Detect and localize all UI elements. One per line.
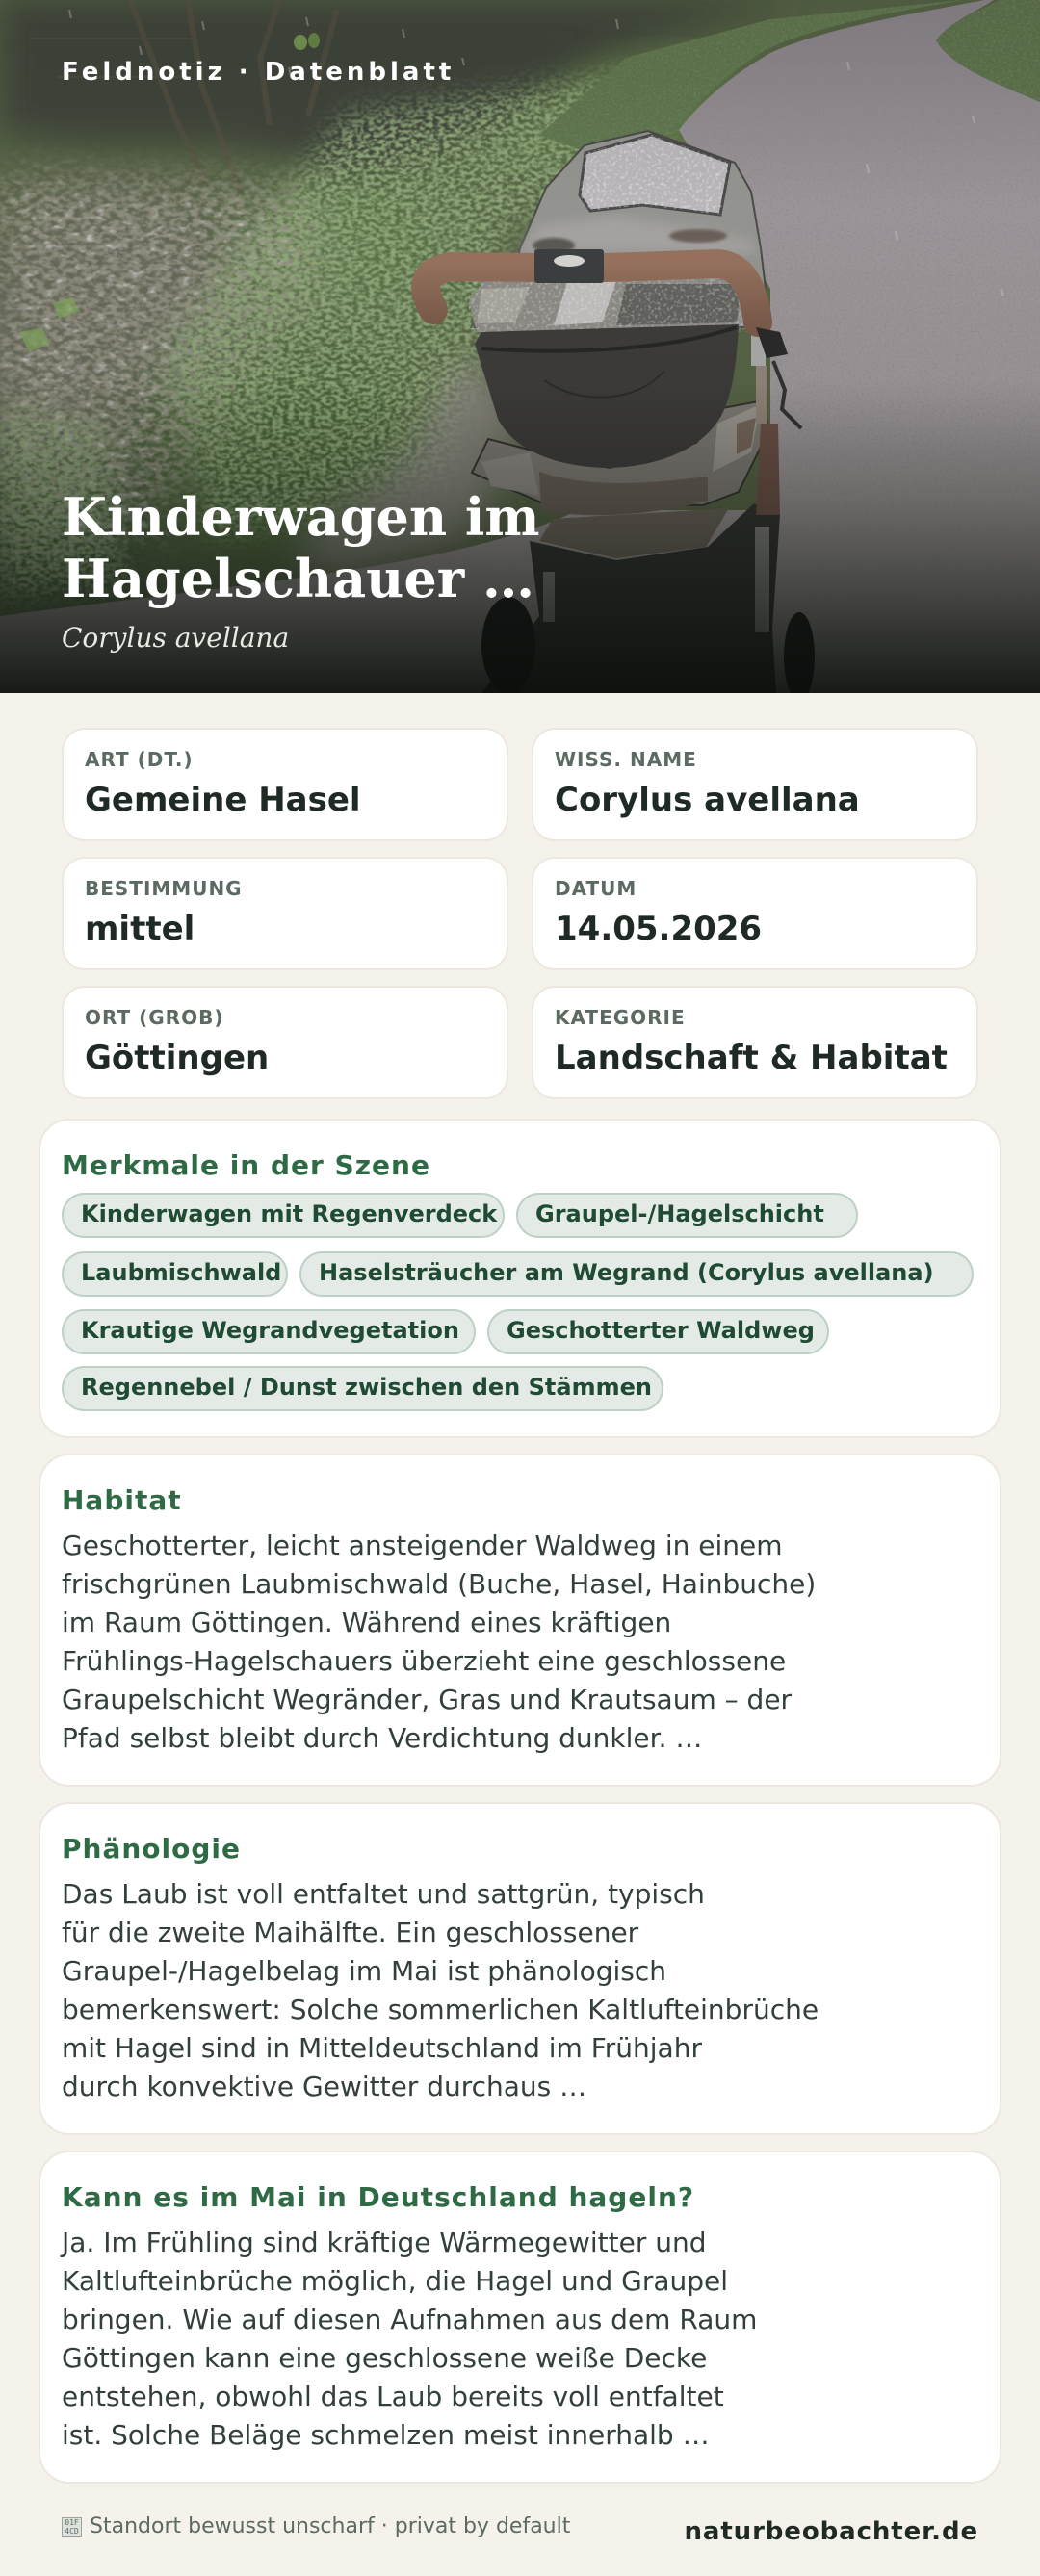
forest edge at the top: [0, 0, 799, 193]
title: Hagelschauer …: [62, 548, 534, 609]
grass and hail texture: [0, 67, 684, 597]
fact card: Ort: Göttingen: [85, 1039, 269, 1077]
fact card: wiss. Name: WISS. NAME: [555, 748, 697, 771]
chip: [62, 1251, 288, 1297]
panel: Kann es im Mai hageln: [39, 2151, 1001, 2484]
fact card: wiss. Name: [532, 728, 978, 841]
species name: Corylus avellana: [62, 622, 289, 654]
fact card: Art: [62, 728, 508, 841]
fact card: Bestimmung: mittel: [85, 910, 195, 948]
photo: stroller on a forest path in hail: [0, 0, 1040, 693]
fact card: Kategorie: Landschaft & Habitat: [555, 1039, 948, 1077]
body text: Geschotterter, leicht ansteigender Waldweg in einem: [62, 1530, 783, 1561]
lower rain cover: [472, 400, 768, 505]
fact card: Kategorie: KATEGORIE: [555, 1006, 686, 1029]
body text: Kaltlufteinbrüche möglich, die Hagel und Graupel: [62, 2265, 728, 2297]
body text: [62, 1530, 816, 1754]
chip: [62, 1366, 663, 1411]
body text: für die zweite Maihälfte. Ein geschlossener: [62, 1917, 638, 1948]
transparent lens under handle: [469, 279, 751, 332]
title: [62, 486, 540, 609]
body text: Graupel-/Hagelbelag im Mai ist phänologisch: [62, 1955, 666, 1987]
chip: [487, 1309, 829, 1354]
black basket: [475, 324, 739, 468]
chip: Laubmischwald: [81, 1259, 281, 1286]
panel: Merkmale in der Szene: [39, 1119, 1001, 1438]
eyebrow: Feldnotiz · Datenblatt: [62, 58, 455, 87]
body text: durch konvektive Gewitter durchaus …: [62, 2071, 586, 2102]
fact card: Datum: [532, 857, 978, 970]
body text: Graupelschicht Wegränder, Gras und Krautsaum – der: [62, 1684, 792, 1715]
chip: Kinderwagen mit Regenverdeck: [81, 1200, 497, 1227]
body text: [60, 2227, 757, 2451]
chip: Haselsträucher am Wegrand (Corylus avellana): [319, 1259, 934, 1286]
fact card: Bestimmung: [62, 857, 508, 970]
gravel path: [0, 0, 1040, 693]
fact card: Art: Gemeine Hasel: [85, 781, 361, 819]
chip: Geschotterter Waldweg: [507, 1317, 815, 1344]
icon: missing-glyph box: 4CD: [65, 2527, 79, 2536]
body text: ist. Solche Beläge schmelzen meist innerhalb …: [62, 2419, 710, 2451]
fact card: Ort: ORT (GROB): [85, 1006, 223, 1029]
fact card: Datum: DATUM: [555, 877, 637, 900]
hero photo with title: [0, 0, 1040, 693]
heading: Merkmale in der Szene: [62, 1149, 430, 1181]
chip: [62, 1193, 505, 1238]
bumper and seat: [539, 508, 729, 558]
heading: Phänologie: [62, 1833, 241, 1865]
footer text: Standort bewusst unscharf · privat by default: [90, 2514, 570, 2538]
footer brand: naturbeobachter.de: [684, 2517, 978, 2546]
dark frame: [481, 503, 780, 693]
chip: [299, 1251, 974, 1297]
fact card: Datum: 14.05.2026: [555, 910, 762, 948]
handle: [426, 264, 758, 322]
fact card: Ort: [62, 986, 508, 1099]
stroller: [426, 131, 815, 701]
far meadow right of the path: [936, 0, 1040, 102]
title: Kinderwagen im: [62, 486, 540, 548]
body text: Pfad selbst bleibt durch Verdichtung dunkler. …: [62, 1722, 702, 1754]
body text: Frühlings-Hagelschauers überzieht eine geschlossene: [62, 1645, 786, 1677]
small bright leaves: [19, 297, 80, 351]
heading: Habitat: [62, 1484, 182, 1516]
meadow base: [0, 0, 1040, 693]
chip: [62, 1309, 476, 1354]
frame poles: [755, 527, 769, 632]
body text: [62, 1878, 819, 2102]
wheels: [481, 597, 535, 693]
icon: missing-glyph box: 01F: [65, 2518, 79, 2527]
rain cover canopy: [472, 131, 766, 327]
chip: Krautige Wegrandvegetation: [81, 1317, 459, 1344]
panel: Habitat: [39, 1454, 1001, 1787]
chip: Graupel-/Hagelschicht: [535, 1200, 824, 1227]
near grass strip left of the path: [539, 0, 963, 164]
body text: frischgrünen Laubmischwald (Buche, Hasel, Hainbuche): [62, 1568, 816, 1600]
body text: Ja. Im Frühling sind kräftige Wärmegewitter und: [62, 2227, 707, 2258]
fact card: Art: ART (DT.): [85, 748, 194, 771]
panel: Phänologie: [39, 1802, 1001, 2135]
icon: missing-glyph box: [62, 2517, 82, 2537]
chip: Regennebel / Dunst zwischen den Stämmen: [81, 1374, 652, 1401]
body text: bringen. Wie auf diesen Aufnahmen aus dem Raum: [62, 2304, 757, 2335]
body text: im Raum Göttingen. Während eines kräftigen: [62, 1607, 671, 1638]
body text: entstehen, obwohl das Laub bereits voll entfaltet: [62, 2381, 724, 2412]
latch and strap: [756, 327, 788, 358]
fact card: Bestimmung: BESTIMMUNG: [85, 877, 243, 900]
heading: Kann es im Mai in Deutschland hageln?: [62, 2181, 694, 2213]
body text: Das Laub ist voll entfaltet und sattgrün, typisch: [62, 1878, 705, 1910]
dark gradient overlay: [0, 0, 1040, 693]
fact card: Kategorie: [532, 986, 978, 1099]
rain streaks: [69, 10, 1003, 296]
chip: [516, 1193, 858, 1238]
fact card: wiss. Name: Corylus avellana: [555, 781, 860, 819]
body text: Göttingen kann eine geschlossene weiße Decke: [62, 2342, 707, 2374]
footer note: [62, 2514, 570, 2538]
body text: bemerkenswert: Solche sommerlichen Kaltlufteinbrüche: [62, 1994, 819, 2025]
body text: mit Hagel sind in Mitteldeutschland im Frühjahr: [62, 2032, 702, 2064]
